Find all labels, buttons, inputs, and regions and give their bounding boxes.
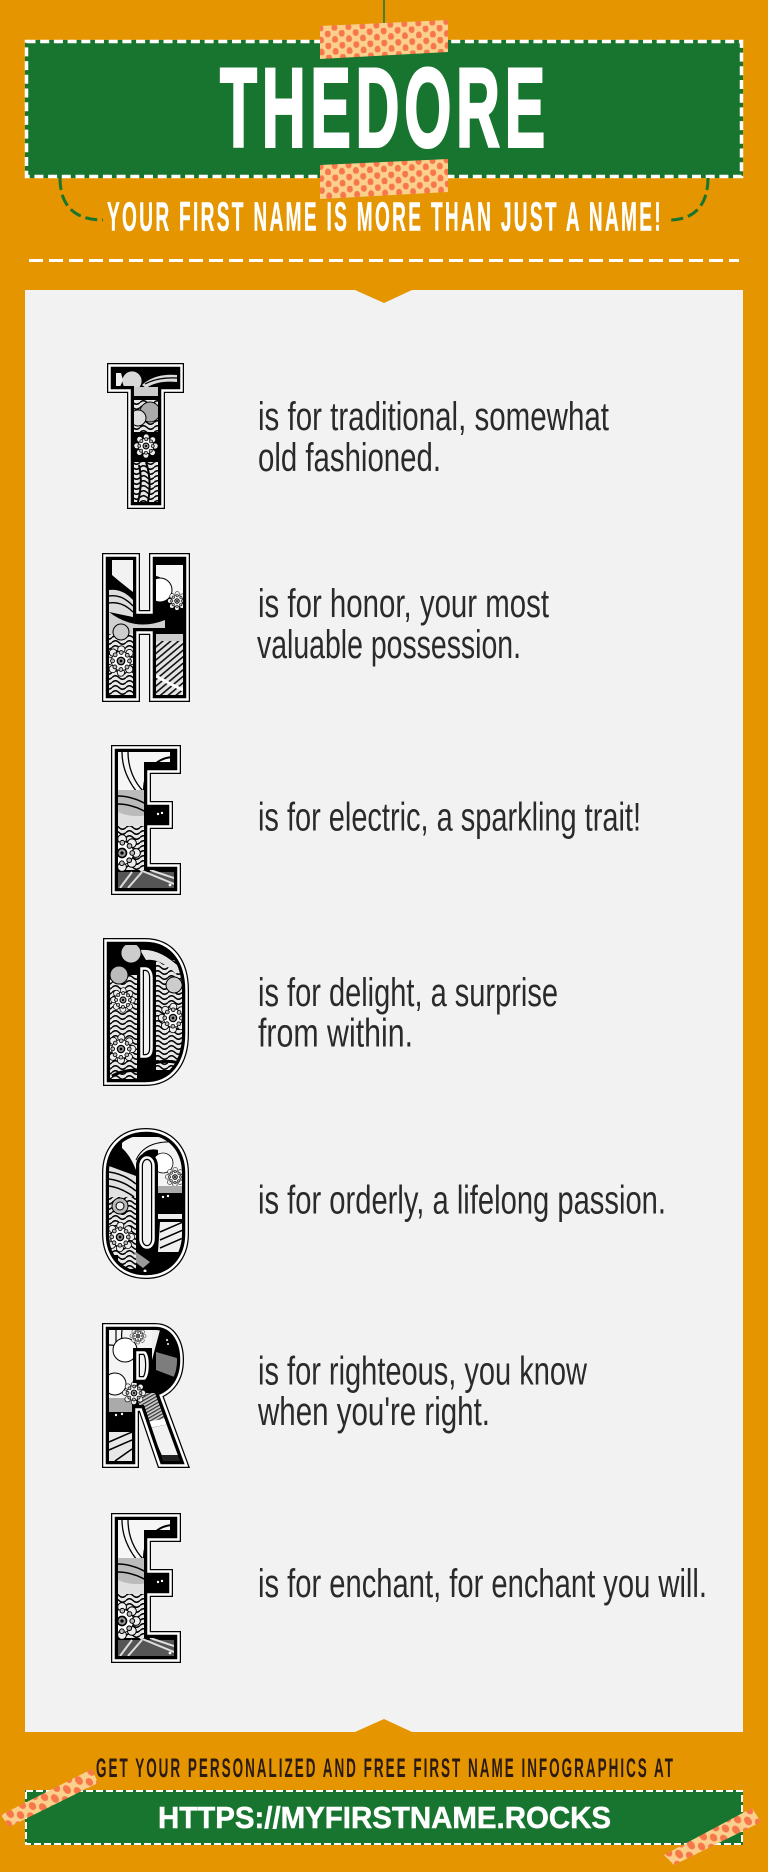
header banner: [25, 40, 743, 178]
text: T description: is for traditional, somewhat: [258, 395, 609, 439]
icon: ornamental letter E: [108, 1520, 174, 1656]
main panel: [25, 290, 743, 1732]
icon: ornamental letter R: [104, 1330, 182, 1464]
text: R description: is for righteous, you know: [258, 1350, 587, 1394]
tape: footer right: [664, 1808, 761, 1865]
dashed divider: [29, 259, 739, 262]
icon: ornamental letter E: [108, 752, 174, 888]
tape: top: [320, 20, 448, 59]
icon: ornamental letter T: [114, 370, 177, 502]
icon: ornamental letter O: [109, 1135, 183, 1272]
icon: ornamental letter H: [109, 560, 184, 695]
dashed connector: left: [60, 178, 103, 220]
hanging line: [383, 0, 385, 24]
row: letter E: [108, 752, 641, 888]
footer banner: [25, 1790, 743, 1845]
text: R description: when you're right.: [257, 1390, 490, 1434]
row: letter H: [109, 560, 549, 695]
row: letter E (second): [108, 1520, 707, 1656]
text: D description: from within.: [258, 1012, 413, 1056]
row: letter R: [104, 1330, 587, 1464]
text: H description: valuable possession.: [257, 623, 521, 667]
dashed connector: right: [669, 178, 708, 220]
text: D description: is for delight, a surprise: [258, 971, 558, 1015]
row: letter D: [110, 943, 558, 1079]
text: H description: is for honor, your most: [258, 582, 549, 626]
row: letter O: [109, 1135, 666, 1272]
tape: footer left: [1, 1769, 98, 1827]
tape: bottom: [320, 159, 448, 199]
footer url: HTTPS://MYFIRSTNAME.ROCKS: [158, 1801, 611, 1835]
row: letter T: [114, 370, 609, 502]
icon: ornamental letter D: [110, 943, 184, 1079]
text: T description: old fashioned.: [258, 436, 441, 480]
